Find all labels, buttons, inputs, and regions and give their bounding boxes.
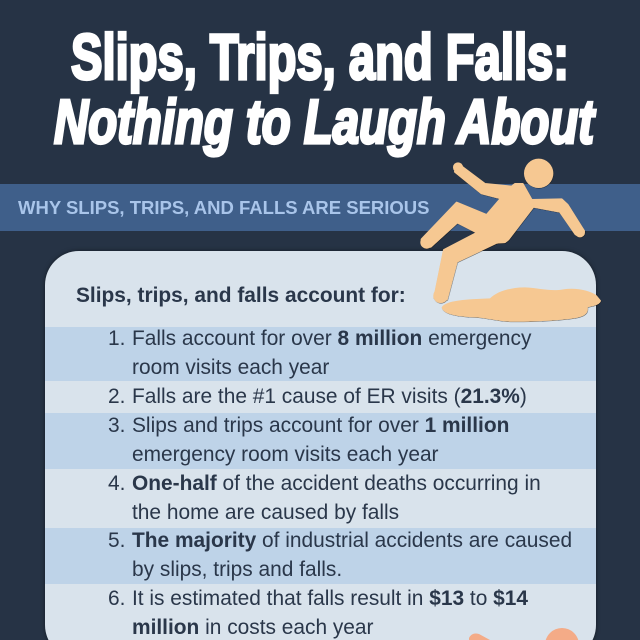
list item 1: 1. [108, 327, 125, 350]
list item 4: One-half of the accident deaths occurring in [132, 472, 541, 495]
list item 6: It is estimated that falls result in $13 to $14 [132, 587, 528, 610]
list item 5: by slips, trips and falls. [132, 558, 342, 581]
panel: statistics list [45, 251, 596, 640]
puddle [442, 287, 601, 322]
title [54, 21, 596, 157]
list item 4: 4. [108, 472, 125, 495]
banner: why slips are serious [0, 184, 640, 231]
list item 2: Falls are the #1 cause of ER visits (21.3%) [132, 385, 527, 408]
list item 2: 2. [108, 385, 125, 408]
list item 3 [108, 414, 509, 466]
icon: partial hands at bottom [469, 628, 579, 640]
banner heading: WHY SLIPS, TRIPS, AND FALLS ARE SERIOUS [18, 197, 430, 218]
list item 4 [108, 472, 541, 524]
list item 1: Falls account for over 8 million emergency [132, 327, 531, 350]
row stripe 1 [45, 327, 596, 381]
list item 5: The majority of industrial accidents are caused [132, 529, 572, 552]
list item 5: 5. [108, 529, 125, 552]
list item 1 [108, 327, 532, 379]
list item 4: the home are caused by falls [132, 501, 399, 524]
row stripe 5 [45, 528, 596, 584]
list item 3: 3. [108, 414, 125, 437]
list item 3: emergency room visits each year [132, 443, 439, 466]
list item 6: million in costs each year [132, 616, 374, 639]
list item 6: 6. [108, 587, 125, 610]
body and limbs [420, 162, 585, 303]
list item 6 [108, 587, 528, 639]
icon: falling person on puddle [420, 159, 601, 322]
row stripe 3 [45, 413, 596, 469]
list item 1: room visits each year [132, 356, 329, 379]
head [524, 159, 553, 188]
panel lead text: Slips, trips, and falls account for: [76, 284, 406, 307]
list item 3: Slips and trips account for over 1 million [132, 414, 509, 437]
list item 5 [108, 529, 572, 581]
